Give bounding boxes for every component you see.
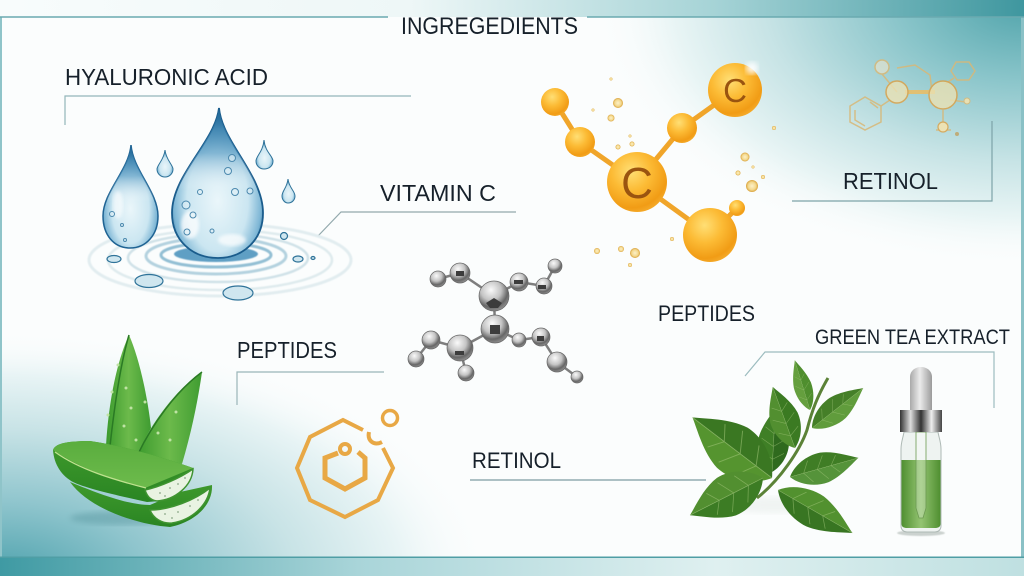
bubbles inside	[110, 154, 253, 242]
title: INGREGEDIENTS	[401, 13, 578, 40]
highlights	[181, 211, 199, 239]
label: hyaluronic acid	[65, 64, 411, 125]
rubber bulb	[910, 367, 932, 410]
bonds	[416, 266, 577, 377]
icon: dropper bottle	[897, 367, 945, 536]
icon: green tea sprig	[677, 358, 871, 548]
glass bottle	[901, 432, 941, 532]
shadow	[70, 511, 180, 525]
atoms	[541, 88, 569, 116]
atoms	[408, 259, 583, 383]
frame line: top, broken by title	[0, 16, 1024, 18]
pulp speckles	[159, 477, 199, 519]
label: hyaluronic acid: HYALURONIC ACID	[65, 64, 268, 90]
icon: retinol molecule	[850, 60, 975, 136]
label: vitamin c: VITAMIN C	[380, 180, 496, 206]
icon: orange peptide ring	[297, 410, 398, 517]
icon: water drops with ripples	[89, 108, 351, 300]
ripples	[89, 224, 351, 296]
lower slab	[70, 482, 212, 527]
letters C: C	[723, 72, 747, 109]
left drop	[103, 145, 158, 248]
floor droplets	[107, 232, 315, 300]
dark centres	[455, 271, 546, 355]
label: retinol top: RETINOL	[843, 168, 938, 194]
icon: gold vitamin c molecule	[541, 62, 776, 267]
upper slab	[53, 441, 193, 502]
shadow	[897, 530, 945, 536]
glow	[746, 62, 758, 74]
big drop	[172, 108, 263, 258]
spikes	[106, 364, 178, 442]
liquid	[902, 460, 940, 528]
label: green tea extract	[745, 326, 1010, 408]
metal collar	[900, 410, 942, 432]
label: peptides right: PEPTIDES	[658, 301, 755, 326]
stem	[757, 378, 828, 498]
label: peptides left: PEPTIDES	[237, 337, 337, 363]
icon: gold vitamin c molecule: C	[621, 159, 653, 208]
leaves	[757, 407, 791, 473]
label: retinol top	[792, 121, 992, 201]
shadow	[720, 497, 830, 513]
icon: aloe vera	[53, 335, 212, 527]
bonds	[555, 90, 737, 235]
label: peptides left	[237, 337, 384, 405]
label: vitamin c	[318, 180, 516, 236]
inner pipette	[916, 432, 926, 518]
small drops	[157, 150, 173, 177]
upright leaves	[106, 335, 151, 456]
icon: silver molecule	[408, 259, 583, 383]
label: retinol bottom: RETINOL	[472, 448, 561, 473]
bubbles	[592, 78, 776, 267]
